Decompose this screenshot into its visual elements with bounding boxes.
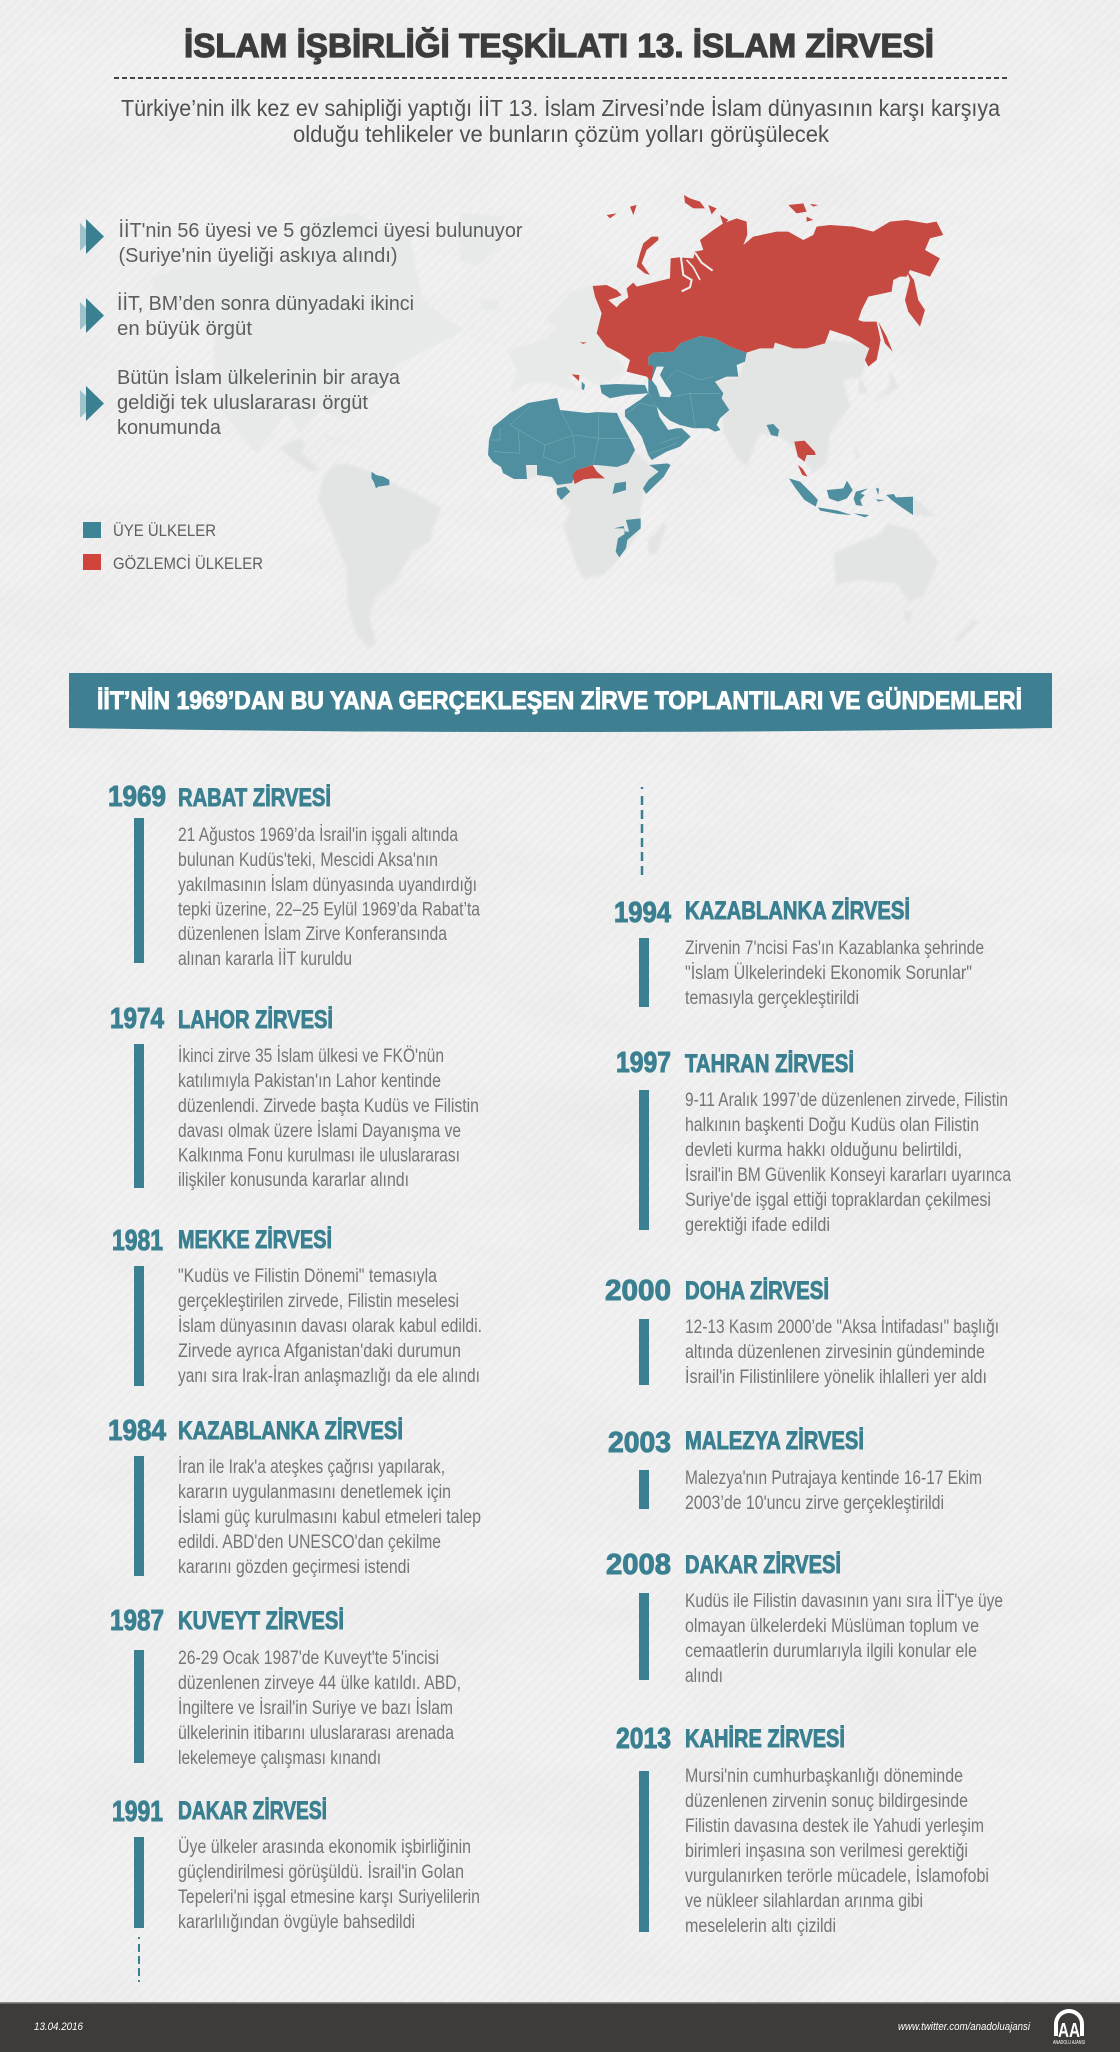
bullet: second largest: en büyük örgüt [117,318,252,340]
summit 1997: devleti kurma hakkı olduğunu belirtildi, [685,1140,962,1161]
summit 1984: 1984 [108,1415,166,1447]
summit 1994: "İslam Ülkelerindeki Ekonomik Sorunlar" [685,963,972,984]
summit 1987: KUVEYT ZİRVESİ [178,1607,344,1635]
summit 2003: 2003 [608,1427,671,1459]
summit 1981: Zirvede ayrıca Afganistan'daki durumun [178,1341,461,1362]
summit 1969: yakılmasının İslam dünyasında uyandırdığı [178,875,477,896]
summit 1994: temasıyla gerçekleştirildi [685,988,859,1009]
summit 1981: MEKKE ZİRVESİ [178,1226,332,1254]
bullet: member count: (Suriye'nin üyeliği askıya alındı) [118,245,398,267]
summit 1981: yanı sıra Irak-İran anlaşmazlığı da ele alındı [178,1366,480,1387]
map: observer countries [572,195,943,484]
summit 1991 [112,1796,480,1933]
summit 1987: İngiltere ve İsrail'in Suriye ve bazı İslam [178,1698,453,1719]
legend: members: ÜYE ÜLKELER [113,521,216,540]
summit 1981: "Kudüs ve Filistin Dönemi" temasıyla [178,1266,437,1287]
summit 1987: düzenlenen zirveye 44 ülke katıldı. ABD, [178,1673,461,1694]
summit 1997: TAHRAN ZİRVESİ [685,1050,854,1078]
summit 2013: vurgulanırken terörle mücadele, İslamofobi [685,1866,989,1887]
summit 2008: Kudüs ile Filistin davasının yanı sıra İİT'ye üye [685,1591,1003,1612]
summit 1969: 21 Ağustos 1969’da İsrail'in işgali altında [178,825,458,846]
summit 1974 [110,1003,479,1191]
bullet: only organisation: konumunda [117,417,222,439]
summit 1984: kararını gözden geçirmesi istendi [178,1557,410,1578]
summit 1974: katılımıyla Pakistan'ın Lahor kentinde [178,1071,441,1092]
summit 1994: 1994 [614,897,671,929]
summit 1984: edildi. ABD'den UNESCO'dan çekilme [178,1532,441,1553]
twitter url: www.twitter.com/anadoluajansi [898,2021,1030,2033]
bullet: second largest [80,292,414,340]
summit 2000: altında düzenlenen zirvesinin gündeminde [685,1342,985,1363]
summit 1974: İkinci zirve 35 İslam ülkesi ve FKÖ'nün [178,1046,444,1067]
summit 2013: meselelerin altı çizildi [685,1916,836,1937]
summit 2000: İsrail'in Filistinlilere yönelik ihlalleri yer aldı [685,1367,987,1388]
summit 1984: İslami güç kurulmasını kabul etmeleri talep [178,1507,481,1528]
summit 1974: düzenlendi. Zirvede başta Kudüs ve Filistin [178,1096,479,1117]
summit 1969 [108,781,480,970]
bullet: only organisation: Bütün İslam ülkelerinin bir araya [117,366,401,389]
summit 2000 [605,1275,999,1388]
subtitle: olduğu tehlikeler ve bunların çözüm yolları görüşülecek [293,121,829,147]
summit 2000: DOHA ZİRVESİ [685,1277,829,1305]
summit 1969: 1969 [108,781,166,813]
summit 1991: Üye ülkeler arasında ekonomik işbirliğinin [178,1837,471,1858]
summit 1984 [108,1415,481,1578]
icon: arrow [80,298,104,333]
summit 1974: LAHOR ZİRVESİ [178,1006,333,1034]
summit 1991: güçlendirilmesi görüşüldü. İsrail'in Golan [178,1862,464,1883]
map: member countries asia [582,336,747,460]
summit 2008: alındı [685,1666,723,1687]
summit 2008: DAKAR ZİRVESİ [685,1551,841,1579]
map: caspian sea, gulfs and borders [490,253,720,463]
summit 1969: düzenlenen İslam Zirve Konferansında [178,924,447,945]
summit 1987: lekelemeye çalışması kınandı [178,1748,381,1769]
summit 1987: 26-29 Ocak 1987'de Kuveyt'te 5'incisi [178,1648,439,1669]
title: İSLAM İŞBİRLİĞİ TEŞKİLATI 13. İSLAM ZİRVESİ [184,27,934,64]
summit 1997: 9-11 Aralık 1997’de düzenlenen zirvede, Filistin [685,1090,1008,1111]
summit 2000: 12-13 Kasım 2000’de "Aksa İntifadası" başlığı [685,1317,999,1338]
summit 2008: 2008 [606,1549,671,1581]
summit 2003: 2003’de 10'uncu zirve gerçekleştirildi [685,1493,944,1514]
map: member countries southeast asia [767,424,913,517]
summit 1974: Kalkınma Fonu kurulması ile uluslararası [178,1146,460,1166]
bullet: member count [80,219,523,267]
summit 2013: Mursi'nin cumhurbaşkanlığı döneminde [685,1766,963,1787]
summit 1997: 1997 [616,1047,671,1079]
icon: anadolu agency logo: AA [1058,2020,1080,2042]
summit 1981: İslam dünyasının davası olarak kabul edildi. [178,1316,482,1337]
map: faint grey land north america and europe [150,213,627,467]
summit 1984: İran ile Irak'a ateşkes çağrısı yapılarak, [178,1457,445,1478]
summit 1997: Suriye'de işgal ettiği topraklardan çekilmesi [685,1190,991,1211]
icon: anadolu agency logo [1053,2009,1085,2046]
summit 1969: bulunan Kudüs'teki, Mescidi Aksa'nın [178,850,438,871]
map: member countries africa [372,398,671,557]
summit 2000: 2000 [605,1275,671,1307]
timeline continuation left [138,1937,140,1983]
summit 1997: İsrail'in BM Güvenlik Konseyi kararları uyarınca [685,1165,1011,1186]
legend [83,521,263,573]
summit 1997: gerektiği ifade edildi [685,1215,830,1236]
summit 1994 [614,897,984,1009]
date: 13.04.2016 [34,2021,84,2033]
timeline continuation right [641,787,643,878]
summit 1987 [110,1605,461,1769]
summit 1984: KAZABLANKA ZİRVESİ [178,1417,403,1445]
summit 1987: ülkelerinin itibarını uluslararası arenada [178,1723,454,1744]
summit 1969: RABAT ZİRVESİ [178,784,331,812]
subtitle: Türkiye’nin ilk kez ev sahipliği yaptığı İİT 13. İslam Zirvesi’nde İslam dünyasının karşı karşıya [121,95,1000,121]
summit 1981 [112,1225,482,1387]
summit 2003: MALEZYA ZİRVESİ [685,1427,864,1455]
summit 1987: 1987 [110,1605,164,1637]
summit 2013: düzenlenen zirvenin sonuç bildirgesinde [685,1791,968,1812]
icon: arrow [80,386,104,421]
summit 2008: cemaatlerin durumlarıyla ilgili konular ele [685,1641,977,1662]
world map [150,195,979,648]
summit 2003 [608,1427,982,1514]
legend: observers: GÖZLEMCİ ÜLKELER [113,554,263,573]
section banner [69,673,1052,732]
summit 2003: Malezya'nın Putrajaya kentinde 16-17 Ekim [685,1468,982,1489]
summit 1981: 1981 [112,1225,163,1257]
summit 1974: ilişkiler konusunda kararlar alındı [178,1170,409,1191]
summit 1969: alınan kararla İİT kuruldu [178,949,352,970]
subtitle [121,95,1000,147]
summit 1994: KAZABLANKA ZİRVESİ [685,897,910,925]
summit 2008: olmayan ülkelerdeki Müslüman toplum ve [685,1616,979,1637]
summit 1974: davası olmak üzere İslami Dayanışma ve [178,1121,461,1142]
icon: anadolu agency logo: ANADOLU AJANSI [1053,2040,1085,2046]
summit 2013 [616,1723,989,1937]
summit 1969: tepki üzerine, 22–25 Eylül 1969’da Rabat’ta [178,900,480,920]
legend: members [83,521,216,540]
summit 2013: 2013 [616,1723,671,1755]
bullet: only organisation: geldiği tek uluslararası örgüt [117,392,368,414]
summit 1997: halkının başkenti Doğu Kudüs olan Filistin [685,1115,979,1136]
map: grey land asia africa south america australia [280,340,979,648]
summit 2013: Filistin davasına destek ile Yahudi yerleşim [685,1816,984,1837]
bullet: second largest: İİT, BM’den sonra dünyadaki ikinci [117,292,414,315]
summit 1994: Zirvenin 7'ncisi Fas'ın Kazablanka şehrinde [685,938,984,959]
section banner: İİT’NİN 1969’DAN BU YANA GERÇEKLEŞEN ZİRVE TOPLANTILARI VE GÜNDEMLERİ [97,686,1022,715]
summit 1974: 1974 [110,1003,164,1035]
summit 1991: kararlılığından övgüyle bahsedildi [178,1912,415,1933]
summit 2013: birimleri inşasına son verilmesi gerektiği [685,1841,968,1862]
summit 2008 [606,1549,1003,1687]
summit 2013: KAHİRE ZİRVESİ [685,1725,845,1753]
summit 1984: kararın uygulanmasını denetlemek için [178,1482,451,1503]
summit 1981: gerçekleştirilen zirvede, Filistin meselesi [178,1291,459,1312]
summit 1991: Tepeleri'ni işgal etmesine karşı Suriyelilerin [178,1887,480,1908]
bullet: only organisation [80,366,401,439]
footer [0,2002,1120,2052]
bullet: member count: İİT'nin 56 üyesi ve 5 gözlemci üyesi bulunuyor [118,219,523,242]
summit 1991: 1991 [112,1796,163,1828]
summit 2013: ve nükleer silahlardan arınma gibi [685,1891,923,1912]
icon: arrow [80,219,104,254]
summit 1997 [616,1047,1011,1236]
summit 1991: DAKAR ZİRVESİ [178,1797,327,1825]
